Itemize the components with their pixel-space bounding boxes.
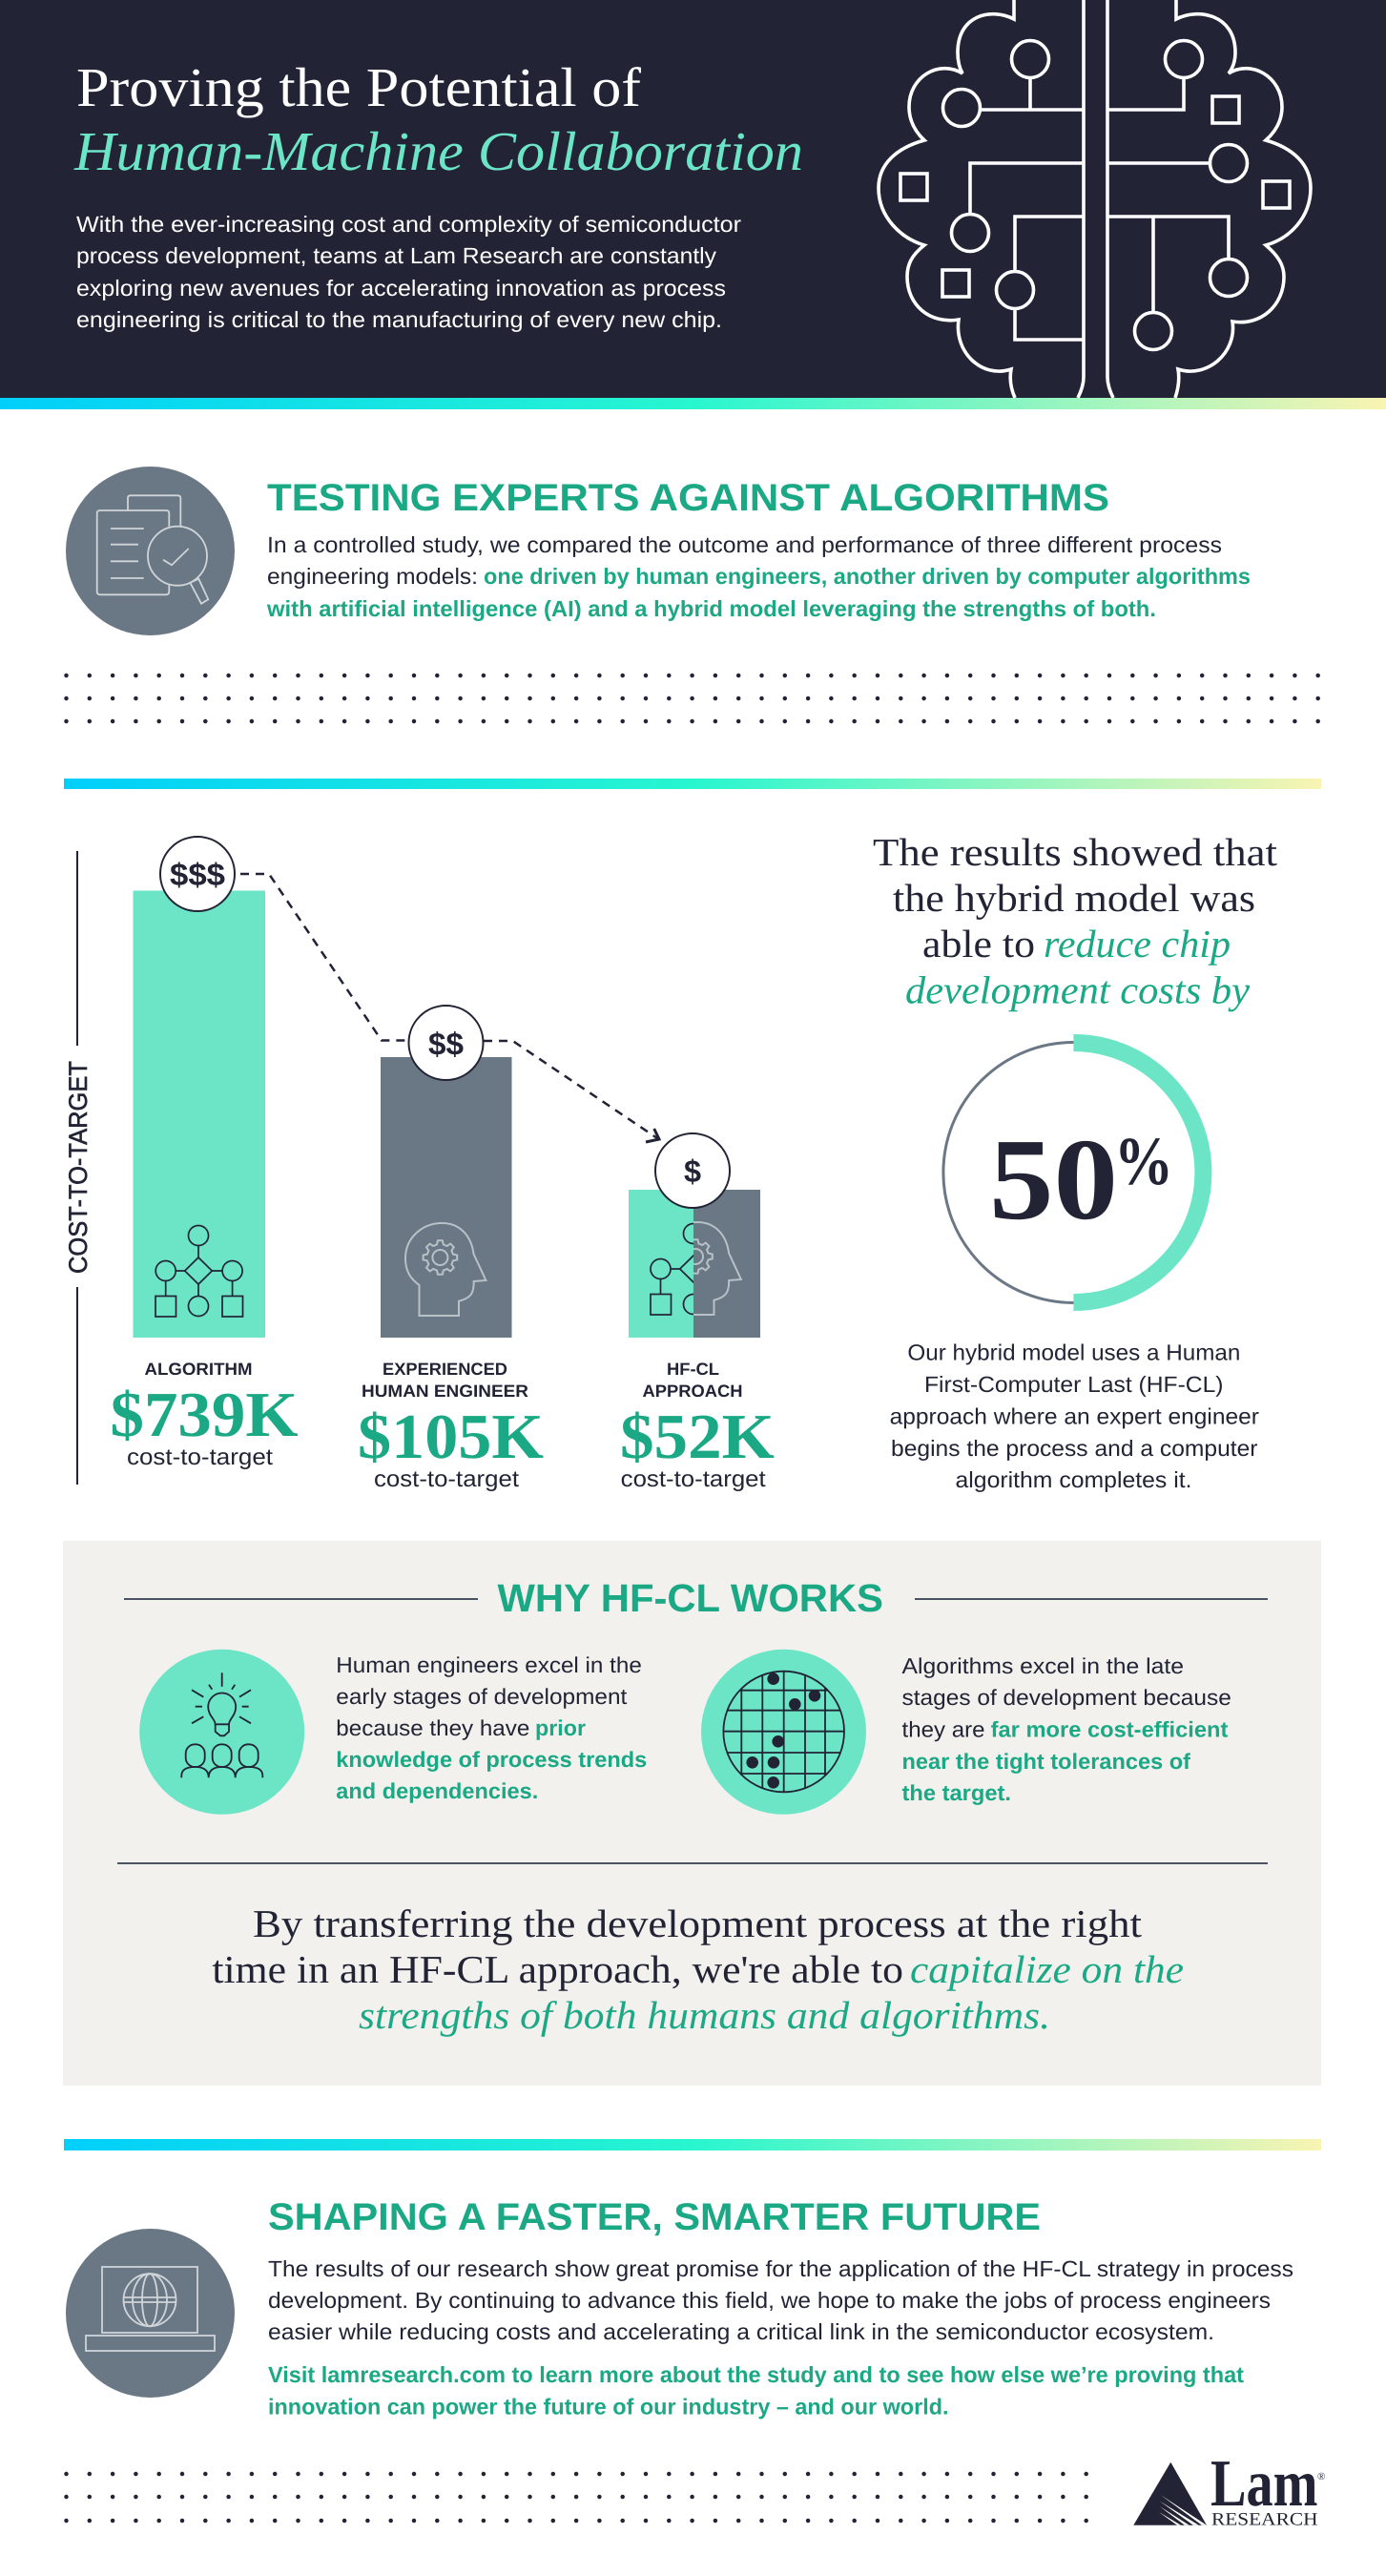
heading: TESTING EXPERTS AGAINST ALGORITHMS (267, 477, 1109, 519)
section: testing experts (66, 467, 1251, 635)
icon: lightbulb and people (139, 1650, 304, 1815)
results statement (873, 830, 1278, 1011)
results statement: development costs by (905, 967, 1251, 1011)
human engineers text: because they have (336, 1715, 529, 1740)
dashed arrow (240, 874, 659, 1142)
bar chart: cost-to-target (64, 837, 775, 1492)
label: experienced human engineer: cost-to-target (374, 1466, 519, 1492)
logo: Lam Research: Lam (1210, 2447, 1318, 2521)
panel heading: WHY HF-CL WORKS (498, 1576, 883, 1620)
label: HF-CL approach (620, 1360, 775, 1492)
body text: The results of our research show great promise for the application of the HF-CL strategy in process (268, 2256, 1293, 2281)
body text: easier while reducing costs and accelerating a critical link in the semiconductor ecosystem. (268, 2319, 1214, 2344)
icon: circuit brain (879, 0, 1311, 398)
title (73, 56, 803, 182)
algorithms text: the target. (902, 1780, 1011, 1805)
human engineers text: Human engineers excel in the (336, 1652, 642, 1677)
hybrid model description: Our hybrid model uses a Human (907, 1340, 1240, 1365)
call to action (268, 2362, 1244, 2420)
body text: In a controlled study, we compared the outcome and performance of three different process (267, 532, 1222, 557)
label: algorithm: $739K (111, 1380, 298, 1450)
bar: experienced human engineer (381, 1057, 511, 1338)
ring chart: 50%: % (1114, 1123, 1173, 1199)
header intro text: process development, teams at Lam Research are constantly (76, 243, 716, 268)
header intro text (76, 212, 741, 332)
algorithms text (902, 1653, 1231, 1805)
algorithms text: Algorithms excel in the late (902, 1653, 1184, 1678)
human engineers text: early stages of development (336, 1684, 628, 1709)
conclusion statement: strengths of both humans and algorithms. (359, 1993, 1050, 2037)
label: experienced human engineer: EXPERIENCED (383, 1360, 507, 1379)
axis label: COST-TO-TARGET (64, 1061, 93, 1274)
hybrid model description: First-Computer Last (HF-CL) (924, 1372, 1223, 1397)
human engineers text: knowledge of process trends (336, 1747, 647, 1772)
conclusion statement (212, 1901, 1184, 2037)
conclusion statement: By transferring the development process at the right (253, 1901, 1143, 1945)
call to action: Visit lamresearch.com to learn more about the study and to see how else we’re proving that (268, 2362, 1244, 2387)
human engineers text: prior (535, 1715, 586, 1740)
algorithms text: they are (902, 1717, 984, 1742)
ring chart: 50%: 50 (989, 1115, 1118, 1244)
logo: Lam Research: RESEARCH (1211, 2510, 1318, 2530)
title: Human-Machine Collaboration (73, 120, 803, 182)
label: HF-CL approach: cost-to-target (621, 1466, 766, 1492)
heading: SHAPING A FASTER, SMARTER FUTURE (268, 2196, 1041, 2238)
bar: HF-CL approach (629, 1190, 760, 1338)
icon: wafer grid (701, 1650, 866, 1815)
body text: with artificial intelligence (AI) and a hybrid model leveraging the strengths of both. (266, 596, 1156, 621)
logo: Lam Research (1133, 2447, 1325, 2530)
label: algorithm (111, 1360, 298, 1470)
label: algorithm: ALGORITHM (145, 1360, 252, 1379)
cost badges: $ (684, 1153, 701, 1189)
header gradient bar (0, 398, 1386, 409)
results statement: able to (922, 922, 1035, 966)
hybrid model description (890, 1340, 1259, 1492)
label: experienced human engineer: $105K (358, 1402, 544, 1472)
bar: algorithm (134, 891, 265, 1338)
results statement: The results showed that (873, 830, 1278, 874)
gradient divider (64, 2139, 1321, 2150)
conclusion statement: time in an HF-CL approach, we're able to (212, 1947, 903, 1991)
algorithms text: near the tight tolerances of (902, 1749, 1190, 1774)
cost badges: $$ (428, 1027, 464, 1061)
header intro text: With the ever-increasing cost and complexity of semiconductor (76, 212, 741, 237)
ring chart: 50% (943, 1042, 1204, 1303)
header intro text: exploring new avenues for accelerating innovation as process (76, 276, 726, 301)
results statement: the hybrid model was (893, 876, 1255, 920)
body text: one driven by human engineers, another driven by computer algorithms (484, 564, 1251, 589)
gradient divider (64, 779, 1321, 789)
human engineers text: and dependencies. (336, 1778, 538, 1803)
hybrid model description: begins the process and a computer (891, 1436, 1258, 1461)
icon: document with magnifier (66, 467, 235, 635)
header intro text: engineering is critical to the manufacturing of every new chip. (76, 307, 722, 332)
label: HF-CL approach: $52K (620, 1402, 775, 1472)
logo: Lam Research: ® (1317, 2471, 1325, 2483)
label: HF-CL approach: APPROACH (643, 1381, 742, 1401)
body text (266, 532, 1251, 621)
body text (268, 2256, 1293, 2344)
header panel (0, 0, 1386, 409)
algorithms text: far more cost-efficient (991, 1717, 1229, 1742)
icon: globe on laptop (66, 2229, 235, 2398)
label: experienced human engineer: HUMAN ENGINEER (362, 1381, 528, 1401)
body text: engineering models: (267, 564, 478, 589)
body text: development. By continuing to advance this field, we hope to make the jobs of process engineers (268, 2288, 1271, 2313)
section: shaping the future (66, 2196, 1293, 2420)
label: experienced human engineer (358, 1360, 544, 1492)
cost badges: $$$ (170, 857, 225, 892)
label: HF-CL approach: HF-CL (667, 1360, 719, 1379)
hybrid model description: approach where an expert engineer (890, 1404, 1259, 1429)
algorithms text: stages of development because (902, 1685, 1231, 1710)
human engineers text (336, 1652, 647, 1803)
cost badges (160, 837, 730, 1208)
title: Proving the Potential of (76, 56, 642, 118)
hybrid model description: algorithm completes it. (956, 1467, 1192, 1492)
label: algorithm: cost-to-target (127, 1444, 273, 1470)
panel: why HF-CL works (63, 1541, 1321, 2086)
call to action: innovation can power the future of our industry – and our world. (268, 2395, 948, 2420)
conclusion statement: capitalize on the (910, 1947, 1184, 1991)
results statement: reduce chip (1044, 922, 1231, 966)
